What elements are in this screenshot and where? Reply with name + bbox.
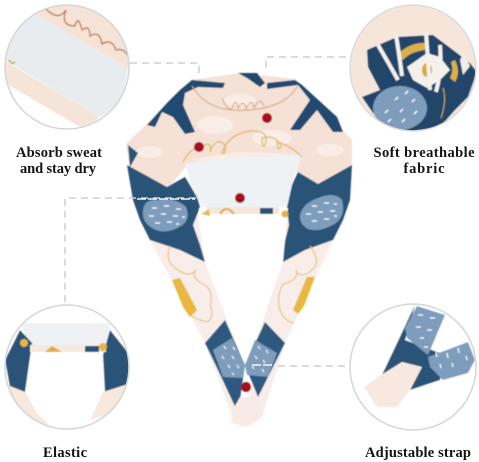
red marker: adjustable strap [241, 382, 251, 392]
scrub cap illustration [126, 73, 352, 427]
right gold key [293, 277, 315, 314]
label: adjustable strap: Adjustable strap [365, 445, 471, 461]
right strap peach [247, 200, 350, 427]
strap tip [231, 397, 262, 427]
white inner lining [185, 155, 303, 207]
right strap navy band [245, 322, 285, 397]
label: absorb sweat: Absorb sweat [16, 145, 102, 161]
navy left arm [147, 80, 225, 134]
red marker: absorb sweat [194, 142, 204, 152]
label: soft breathable: Soft breathable [374, 145, 475, 161]
red marker: elastic [235, 193, 245, 203]
rust curl motif [192, 86, 298, 110]
white dashes over navy [137, 199, 275, 365]
navy right side panel [283, 165, 352, 262]
leader lines [65, 57, 349, 366]
left strap peach [133, 200, 247, 427]
left cloud pattern [143, 199, 188, 232]
left strap navy band [205, 320, 245, 413]
right cloud pattern [300, 195, 343, 230]
strap gold curls [168, 246, 317, 323]
inner opening [199, 208, 288, 365]
callout circle: adjustable strap [345, 300, 479, 434]
right strap blue pattern [245, 340, 277, 377]
callout circle: elastic [4, 304, 130, 430]
red marker: soft fabric [262, 113, 272, 123]
navy right arm [267, 80, 343, 132]
crown fabric highlights [136, 94, 344, 164]
callout circle: absorb sweat [4, 4, 130, 130]
gold curl motif [183, 131, 302, 162]
callout circle: soft breathable fabric [345, 0, 479, 134]
left gold key [172, 278, 197, 317]
navy left side panel [127, 165, 205, 262]
gathered elastic strip [201, 207, 288, 218]
navy left corner [128, 145, 138, 167]
label: elastic: Elastic [43, 445, 88, 461]
left strap blue pattern [213, 338, 245, 378]
crown peach fabric [126, 73, 352, 190]
label: fabric: fabric [404, 161, 445, 177]
label: and stay dry: and stay dry [20, 161, 97, 177]
navy top centre [238, 73, 265, 87]
